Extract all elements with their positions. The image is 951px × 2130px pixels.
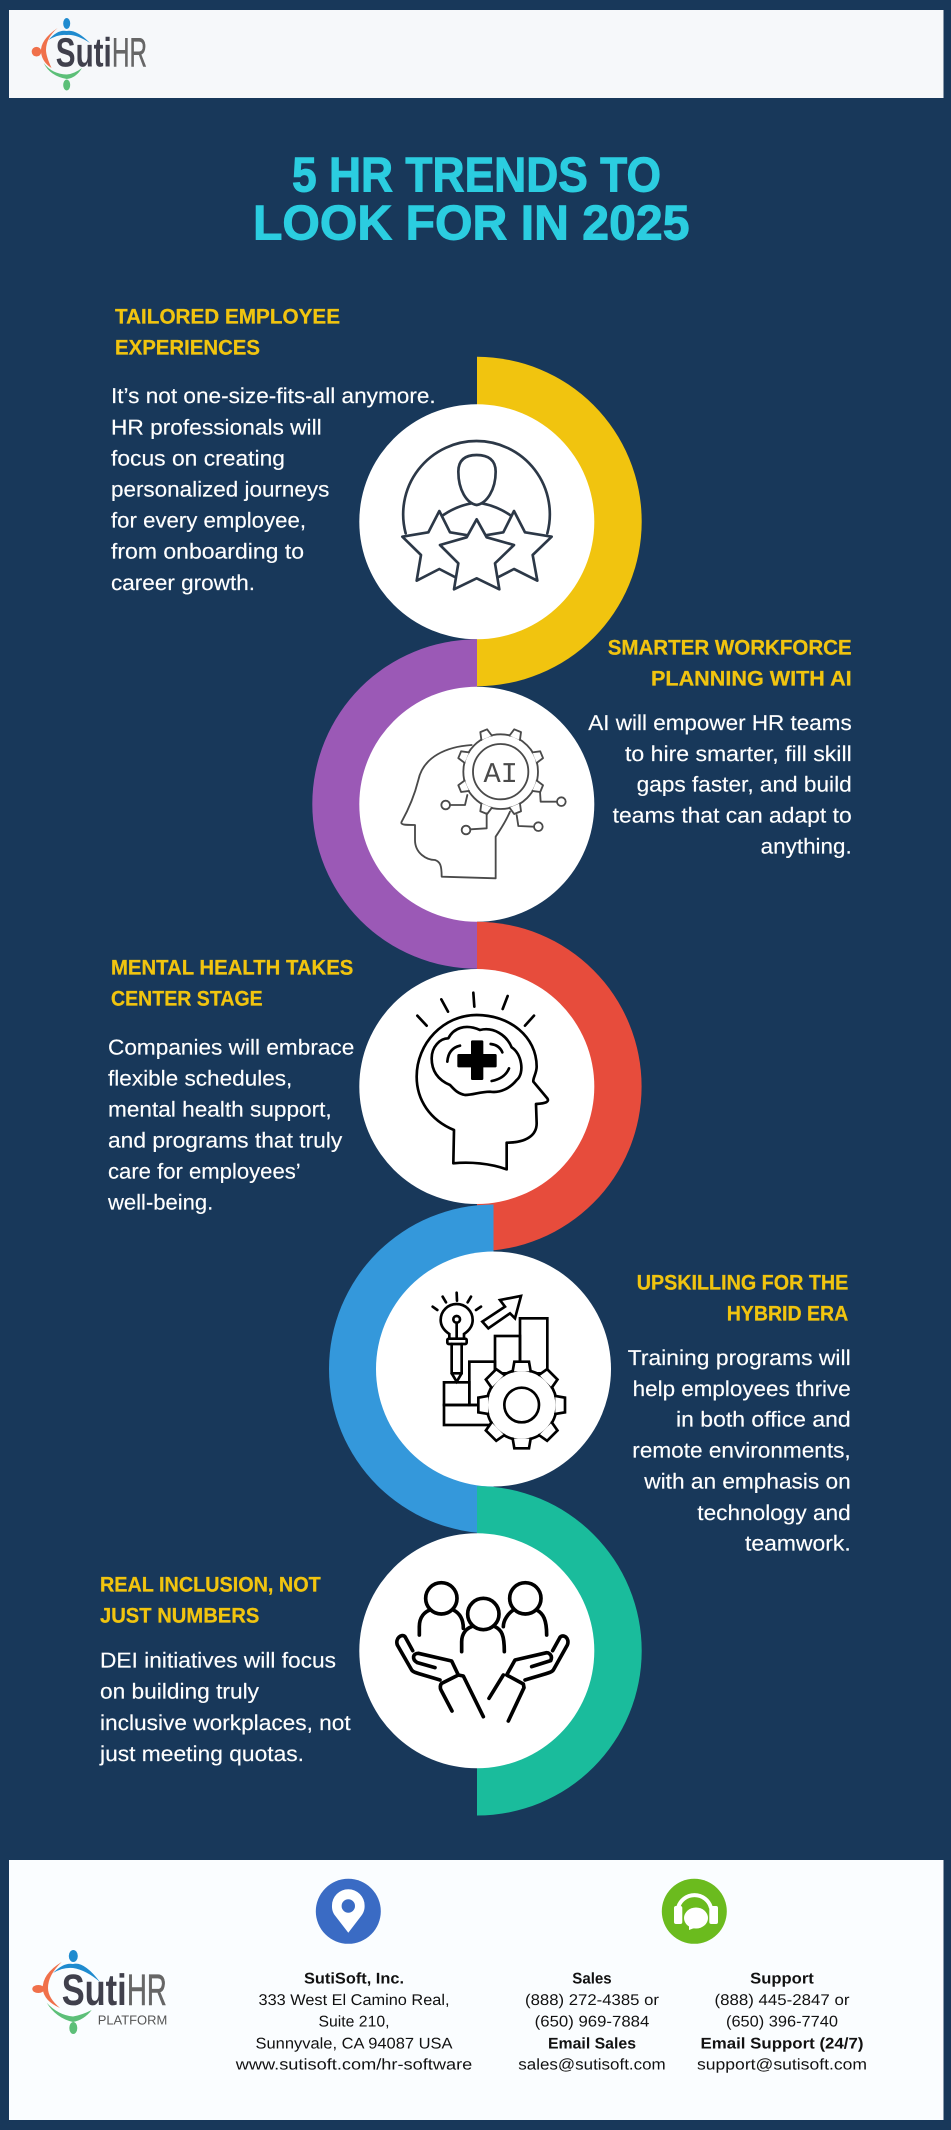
trend 5 text: real inclusion: JUST NUMBERS [100, 1604, 259, 1627]
trend 2 ring and icon [312, 639, 594, 969]
trend 3 text: mental health: and programs that truly [108, 1129, 343, 1153]
trend 5 text: real inclusion: inclusive workplaces, not [100, 1711, 351, 1735]
title [253, 149, 690, 250]
trend 5 text: real inclusion: DEI initiatives will focus [100, 1649, 336, 1673]
sales column: Sales [572, 1970, 612, 1987]
icon: light bulb, growth bars and gear [433, 1293, 565, 1448]
logo: SutiHR: HR [112, 30, 147, 76]
icon: location pin [316, 1879, 381, 1944]
trend 3 text: mental health: MENTAL HEALTH TAKES [111, 956, 353, 979]
trend 2 text: smarter workforce planning [588, 636, 852, 858]
trend 2 text: smarter workforce planning: PLANNING WITH AI [651, 668, 852, 691]
trend 1 text: tailored employee experiences: from onboarding to [111, 540, 304, 564]
trend 4 text: upskilling: remote environments, [632, 1439, 851, 1463]
sales column [518, 1970, 666, 2073]
trend 5 text: real inclusion [99, 1574, 351, 1766]
trend 1 ring and icon [359, 357, 642, 686]
trend 5 text: real inclusion: on building truly [100, 1680, 259, 1704]
support column: support@sutisoft.com [697, 2056, 867, 2073]
logo: SutiHR: Suti [56, 30, 112, 76]
support column: (650) 396-7740 [726, 2014, 838, 2031]
trend 5 text: real inclusion: just meeting quotas. [99, 1742, 304, 1766]
footer panel [9, 1860, 944, 2120]
trend 4 text: upskilling: HYBRID ERA [727, 1303, 848, 1326]
trend 2 text: smarter workforce planning: SMARTER WORKFORCE [608, 636, 852, 659]
icon: person with three stars [402, 441, 552, 589]
trend 3 text: mental health: flexible schedules, [108, 1067, 292, 1091]
support column [697, 1970, 867, 2073]
trend 1 text: tailored employee experiences: personalized journeys [111, 478, 329, 502]
trend 4 text: upskilling: in both office and [676, 1408, 851, 1432]
icon: head with brain and medical cross [417, 993, 548, 1169]
sales column: Email Sales [548, 2036, 636, 2053]
trend 2 text: smarter workforce planning: anything. [761, 834, 852, 858]
support column: Support [750, 1970, 814, 1987]
icon: head with AI gear: AI [483, 758, 518, 791]
trend 1 text: tailored employee experiences: TAILORED EMPLOYEE [115, 305, 340, 328]
icon: support headset [662, 1879, 727, 1944]
sales column: sales@sutisoft.com [518, 2056, 666, 2073]
trend 3 text: mental health: Companies will embrace [108, 1035, 354, 1059]
trend 3 text: mental health: care for employees’ [108, 1160, 301, 1184]
trend 4 text: upskilling: Training programs will [628, 1346, 851, 1370]
sales column: (650) 969-7884 [535, 2014, 650, 2031]
footer logo: SutiHR Platform: HR [127, 1966, 167, 2015]
trend 4 text: upskilling: with an emphasis on [643, 1470, 851, 1494]
trend 4 text: upskilling: teamwork. [745, 1532, 851, 1556]
trend 5 text: real inclusion: REAL INCLUSION, NOT [100, 1574, 321, 1597]
header bar [9, 10, 944, 98]
trend 1 text: tailored employee experiences: It’s not one-size-fits-all anymore. [111, 384, 436, 408]
icon: head with AI gear [401, 729, 566, 878]
trend 2 text: smarter workforce planning: teams that can adapt to [613, 804, 852, 828]
icon: hands holding three people [397, 1583, 568, 1721]
trend 1 text: tailored employee experiences: EXPERIENCES [115, 336, 260, 359]
trend 2 text: smarter workforce planning: AI will empower HR teams [588, 711, 852, 735]
trend 2 text: smarter workforce planning: gaps faster, and build [637, 773, 852, 797]
trend 3 ring and icon [359, 922, 642, 1251]
support column: Email Support (24/7) [700, 2036, 864, 2053]
address column [235, 1970, 472, 2073]
address column: 333 West El Camino Real, [258, 1992, 450, 2009]
footer logo: SutiHR Platform: PLATFORM [98, 2012, 167, 2027]
logo: SutiHR [32, 18, 147, 90]
trend 4 text: upskilling [628, 1271, 851, 1556]
trend 3 text: mental health: well-being. [107, 1190, 213, 1214]
trend 4 text: upskilling: technology and [697, 1501, 851, 1525]
footer logo: SutiHR Platform [32, 1950, 167, 2034]
trend 2 text: smarter workforce planning: to hire smarter, fill skill [625, 742, 852, 766]
title: 5 HR TRENDS TO [292, 149, 661, 203]
trend 1 text: tailored employee experiences: career growth. [111, 571, 255, 595]
trend 1 text: tailored employee experiences: for every employee, [111, 508, 306, 532]
trend 1 text: tailored employee experiences: focus on creating [111, 446, 285, 470]
address column: Sunnyvale, CA 94087 USA [256, 2036, 453, 2053]
trend 3 text: mental health [107, 956, 354, 1214]
trend 5 ring and icon [359, 1486, 642, 1816]
trend 3 text: mental health: mental health support, [108, 1098, 332, 1122]
trend 3 text: mental health: CENTER STAGE [111, 988, 263, 1011]
trend 4 text: upskilling: UPSKILLING FOR THE [637, 1271, 848, 1294]
trend 4 text: upskilling: help employees thrive [633, 1377, 851, 1401]
address column: SutiSoft, Inc. [304, 1970, 404, 1987]
address column: Suite 210, [318, 2014, 390, 2031]
sales column: (888) 272-4385 or [525, 1992, 659, 2009]
trend 1 text: tailored employee experiences [111, 305, 436, 595]
footer logo: SutiHR Platform: Suti [62, 1966, 127, 2015]
address column: www.sutisoft.com/hr-software [235, 2056, 472, 2073]
trend 1 text: tailored employee experiences: HR professionals will [111, 415, 322, 439]
trend 4 ring and icon [329, 1204, 611, 1534]
support column: (888) 445-2847 or [714, 1992, 850, 2009]
title: LOOK FOR IN 2025 [253, 196, 690, 250]
